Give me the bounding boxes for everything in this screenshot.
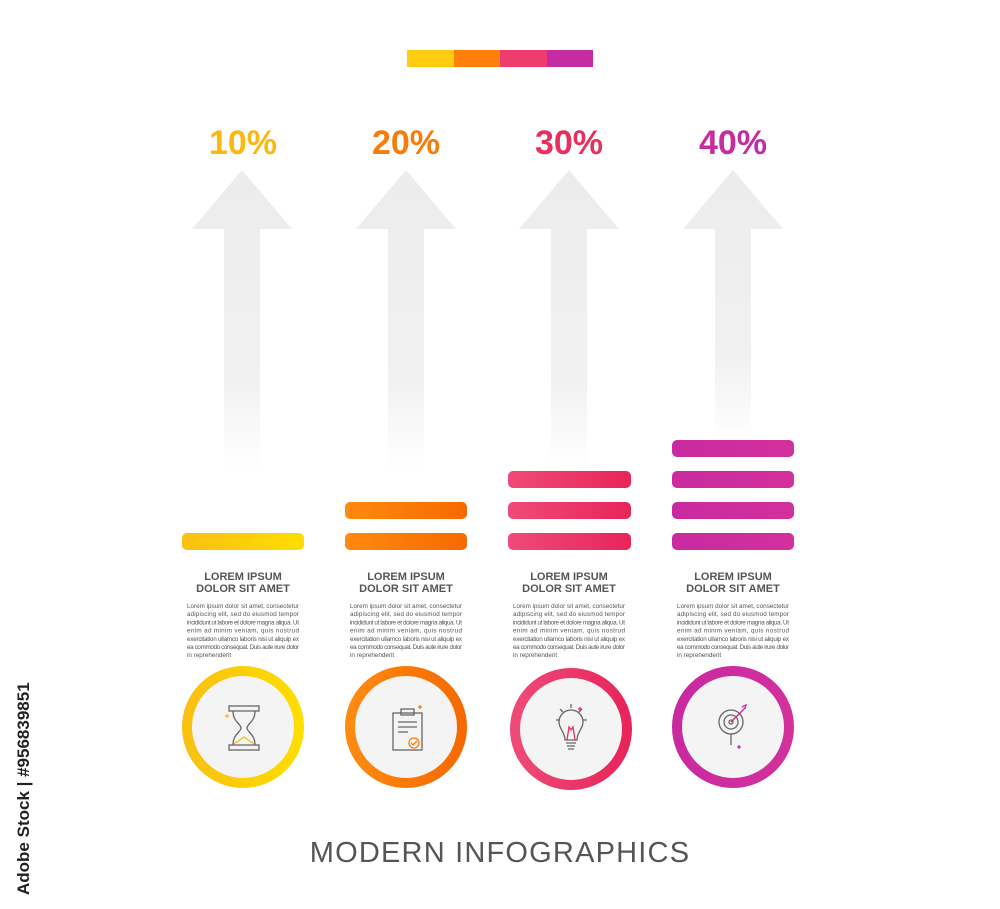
side watermark text: Adobe Stock | #956839851 [14, 682, 33, 895]
headings: LOREM IPSUM [367, 571, 445, 583]
bars [182, 440, 794, 550]
headings: LOREM IPSUM [204, 571, 282, 583]
percentages: 30% [535, 124, 603, 162]
body texts: in reprehenderit [187, 652, 231, 659]
body texts: incididunt ut labore et dolore magna aliqua. Ut [513, 619, 625, 626]
title: MODERN INFOGRAPHICS [310, 837, 690, 869]
body texts: adipiscing elit, sed do eiusmod tempor [513, 611, 625, 618]
headings: LOREM IPSUM [530, 571, 608, 583]
body texts: adipiscing elit, sed do eiusmod tempor [677, 611, 789, 618]
headings: DOLOR SIT AMET [359, 583, 453, 595]
body texts: ea commodo consequat. Duis aute irure dolor [187, 644, 299, 651]
icon: clipboard [393, 705, 422, 750]
arrows [192, 170, 783, 470]
body texts: incididunt ut labore et dolore magna aliqua. Ut [350, 619, 462, 626]
icon: hourglass [225, 706, 259, 750]
percentages: 10% [209, 124, 277, 162]
percentages: 40% [699, 124, 767, 162]
body texts: enim ad minim veniam, quis nostrud [677, 628, 789, 635]
body texts: exercitation ullamco laboris nisi ut aliquip ex [187, 636, 300, 643]
body texts: adipiscing elit, sed do eiusmod tempor [350, 611, 462, 618]
body texts: Lorem ipsum dolor sit amet, consectetur [350, 603, 462, 610]
body texts: exercitation ullamco laboris nisi ut aliquip ex [350, 636, 463, 643]
color legend bar [407, 50, 593, 67]
body texts: in reprehenderit [513, 652, 557, 659]
headings: DOLOR SIT AMET [196, 583, 290, 595]
body texts: enim ad minim veniam, quis nostrud [187, 628, 299, 635]
body texts [187, 603, 790, 659]
body texts: Lorem ipsum dolor sit amet, consectetur [677, 603, 789, 610]
body texts: in reprehenderit [350, 652, 394, 659]
body texts: Lorem ipsum dolor sit amet, consectetur [187, 603, 299, 610]
body texts: incididunt ut labore et dolore magna aliqua. Ut [677, 619, 789, 626]
body texts: incididunt ut labore et dolore magna aliqua. Ut [187, 619, 299, 626]
icon: target [719, 705, 746, 749]
headings: DOLOR SIT AMET [522, 583, 616, 595]
body texts: in reprehenderit [677, 652, 721, 659]
body texts: ea commodo consequat. Duis aute irure dolor [513, 644, 625, 651]
headings: LOREM IPSUM [694, 571, 772, 583]
body texts: ea commodo consequat. Duis aute irure dolor [677, 644, 789, 651]
body texts: exercitation ullamco laboris nisi ut aliquip ex [513, 636, 626, 643]
icon: light bulb [556, 704, 587, 749]
headings: DOLOR SIT AMET [686, 583, 780, 595]
body texts: Lorem ipsum dolor sit amet, consectetur [513, 603, 625, 610]
body texts: enim ad minim veniam, quis nostrud [513, 628, 625, 635]
body texts: enim ad minim veniam, quis nostrud [350, 628, 462, 635]
circles [187, 671, 789, 785]
body texts: ea commodo consequat. Duis aute irure dolor [350, 644, 462, 651]
headings [196, 571, 780, 595]
body texts: exercitation ullamco laboris nisi ut aliquip ex [677, 636, 790, 643]
percentages: 20% [372, 124, 440, 162]
body texts: adipiscing elit, sed do eiusmod tempor [187, 611, 299, 618]
percentages [209, 124, 767, 162]
